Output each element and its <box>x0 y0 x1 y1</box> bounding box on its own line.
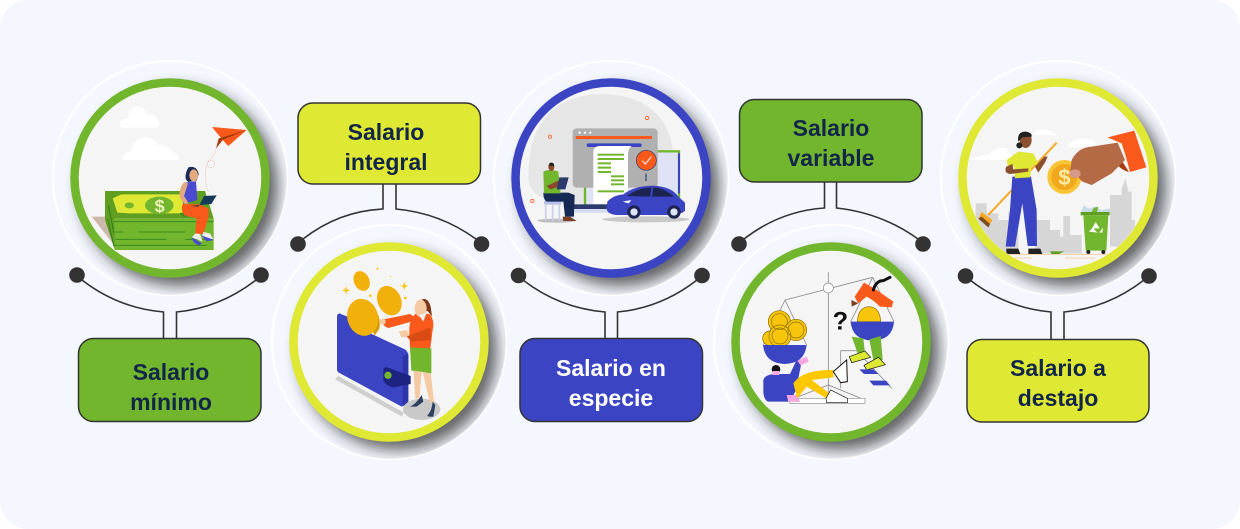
illustration: wallet with coins and woman <box>335 268 440 420</box>
circle frame <box>941 61 1175 295</box>
circle frame <box>714 225 948 459</box>
panel: Salario variable <box>714 100 948 459</box>
illustration: woman on money stack <box>92 107 247 250</box>
label box: Salario <box>793 115 869 141</box>
label box: destajo <box>1018 385 1098 411</box>
connector <box>732 182 930 251</box>
label box <box>298 103 480 184</box>
connector <box>291 184 488 251</box>
panel: Salario integral <box>272 103 506 459</box>
circle frame <box>53 61 287 295</box>
label box: Salario <box>348 119 424 145</box>
panel: Salario mínimo <box>53 61 287 422</box>
label box: especie <box>569 385 653 411</box>
label box <box>740 100 922 182</box>
illustration: man, document and car <box>528 94 689 223</box>
label box: integral <box>344 149 428 175</box>
panel: Salario en especie <box>494 61 728 422</box>
illustration: scale with coins and figures: ? <box>833 307 848 335</box>
connector <box>70 268 268 338</box>
label box: variable <box>788 145 874 171</box>
label box: Salario <box>133 359 209 385</box>
panel: Salario a destajo <box>941 61 1175 422</box>
illustration: worker, coin and recycling bin: $ <box>1058 165 1070 190</box>
label box: Salario a <box>1010 355 1106 381</box>
label box: mínimo <box>130 389 212 415</box>
circle frame <box>494 61 728 295</box>
label box <box>967 340 1149 422</box>
circle frame <box>272 225 506 459</box>
illustration: worker, coin and recycling bin <box>970 129 1146 258</box>
connector <box>958 269 1156 339</box>
illustration: woman on money stack: $ <box>155 196 165 216</box>
label box <box>78 338 261 422</box>
label box: Salario en <box>556 355 666 381</box>
label box <box>520 338 702 422</box>
illustration: scale with coins and figures <box>763 272 894 403</box>
connector <box>512 268 709 338</box>
